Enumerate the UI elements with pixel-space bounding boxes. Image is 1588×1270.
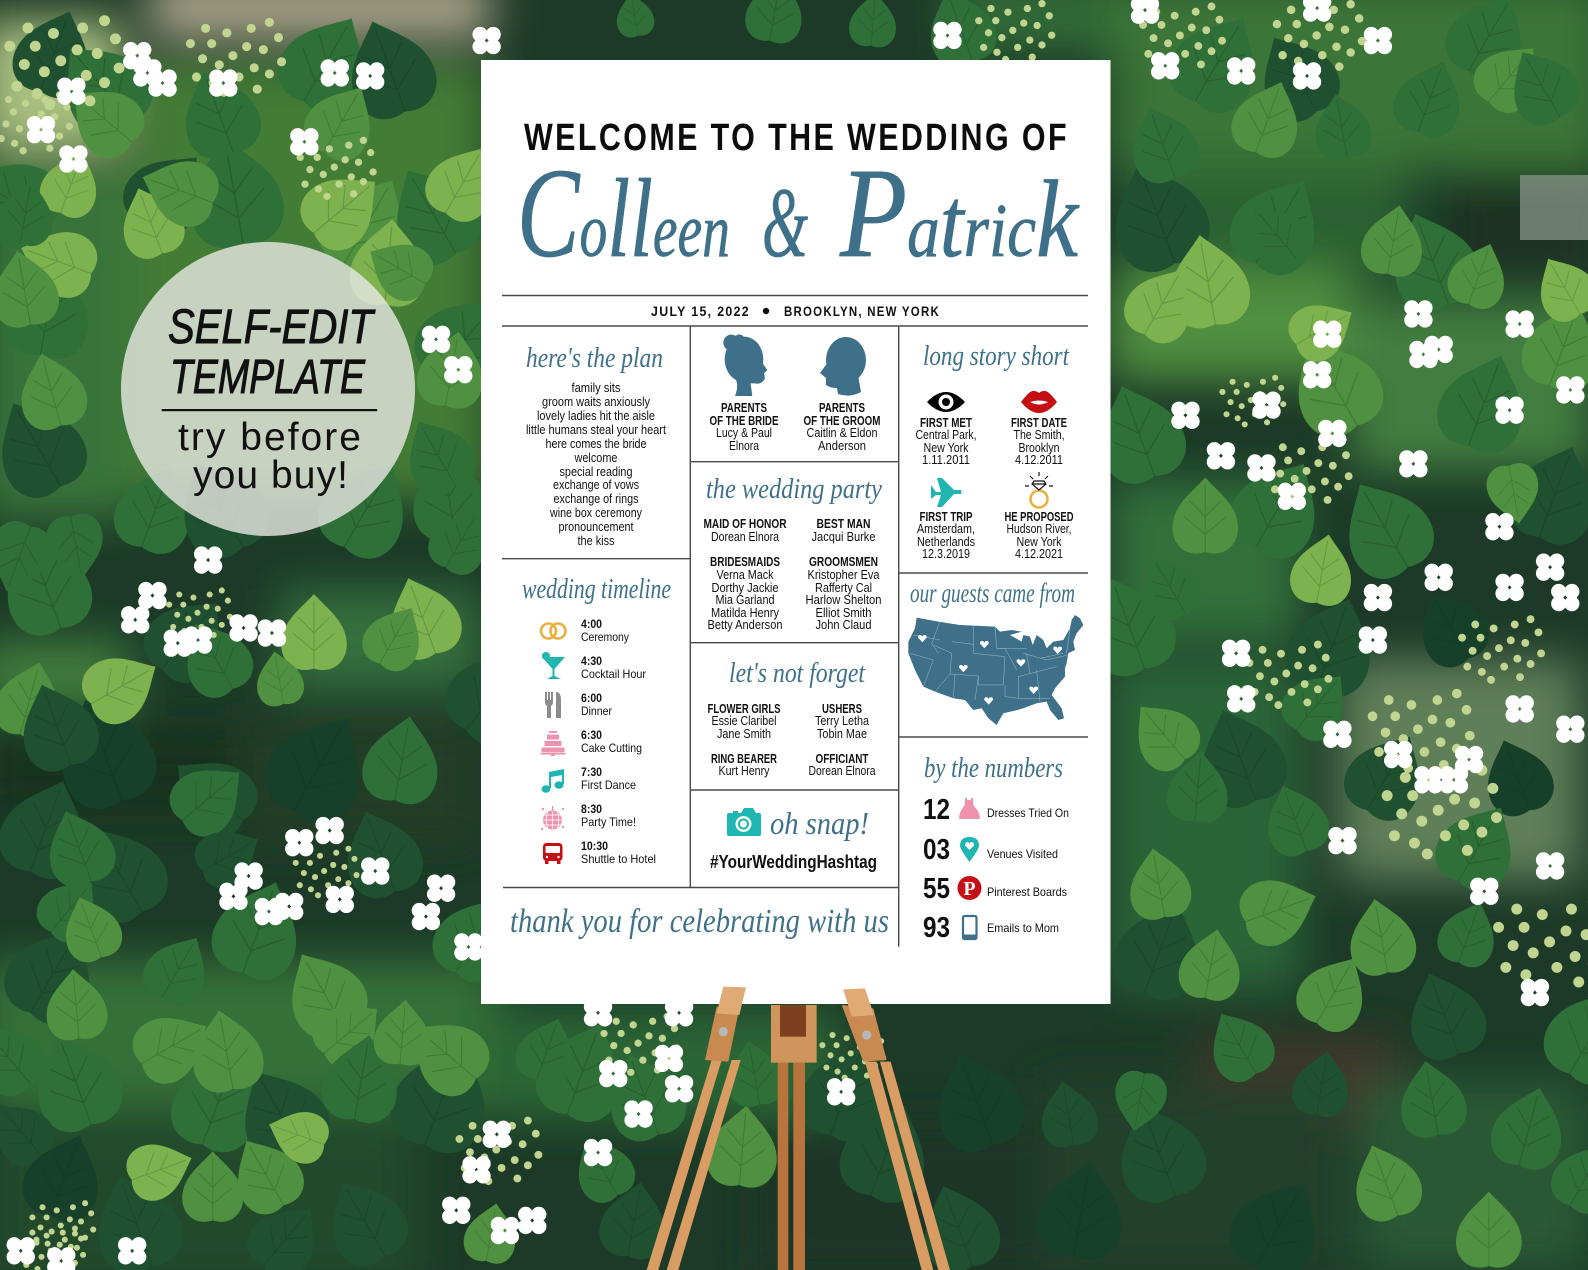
title: WELCOME TO THE WEDDING OF bbox=[524, 117, 1069, 159]
ushers and officiant: USHERS bbox=[822, 702, 862, 716]
bride's side: Mia Garland bbox=[716, 593, 775, 607]
timeline item: first dance: First Dance bbox=[581, 778, 636, 792]
stat: pinterest boards: Pinterest Boards bbox=[987, 885, 1067, 899]
timeline item: cocktail hour: Cocktail Hour bbox=[581, 667, 646, 681]
milestone: first met: New York bbox=[924, 441, 969, 455]
panel: the wedding party bbox=[704, 473, 882, 632]
heading: here's the plan: here's the plan bbox=[526, 342, 663, 374]
bride's side: MAID OF HONOR bbox=[704, 517, 786, 531]
flower girls and ring bearer: FLOWER GIRLS bbox=[708, 702, 780, 716]
milestone: first date bbox=[1011, 416, 1067, 467]
date and location bbox=[651, 303, 940, 319]
stat: dresses tried on: Dresses Tried On bbox=[987, 806, 1069, 820]
window bbox=[1520, 175, 1588, 240]
text: parents of the bride bbox=[710, 401, 778, 453]
timeline item: first dance bbox=[581, 765, 636, 792]
heading: our guests came from: our guests came from bbox=[910, 578, 1075, 608]
ceremony order list: pronouncement bbox=[558, 520, 634, 534]
ceremony order list: wine box ceremony bbox=[549, 506, 643, 520]
ceremony order list: lovely ladies hit the aisle bbox=[537, 409, 655, 423]
badge headline bbox=[168, 301, 376, 404]
ushers and officiant: Dorean Elnora bbox=[808, 764, 876, 778]
panel: wedding timeline bbox=[522, 573, 671, 866]
text: parents of the groom: Caitlin & Eldon bbox=[806, 426, 878, 440]
stat: emails to mom bbox=[923, 912, 1059, 944]
easel bbox=[647, 987, 950, 1270]
flowers bbox=[59, 145, 88, 173]
poster board bbox=[481, 60, 1110, 1004]
stat: emails to mom: 93 bbox=[923, 912, 950, 944]
couple names: Colleen bbox=[517, 142, 730, 284]
text: parents of the bride: Lucy & Paul bbox=[716, 426, 772, 440]
panel: by the numbers bbox=[923, 752, 1069, 944]
groom's side: John Claud bbox=[816, 618, 872, 632]
icon: bus bbox=[543, 843, 562, 864]
milestone: first date: FIRST DATE bbox=[1011, 416, 1067, 430]
timeline item: dinner: Dinner bbox=[581, 704, 612, 718]
timeline item: shuttle to hotel: 10:30 bbox=[581, 839, 608, 853]
timeline item: first dance: 7:30 bbox=[581, 765, 602, 779]
ceremony order list: the kiss bbox=[578, 534, 614, 548]
timeline item: shuttle to hotel bbox=[581, 839, 656, 866]
heading: oh snap: oh snap! bbox=[770, 805, 869, 841]
timeline item: cake cutting: 6:30 bbox=[581, 728, 602, 742]
icon: airplane bbox=[931, 478, 962, 507]
badge headline: SELF-EDIT bbox=[168, 301, 376, 354]
milestone: first trip: 12.3.2019 bbox=[922, 547, 970, 561]
timeline item: cake cutting bbox=[581, 728, 642, 755]
timeline item: party time: Party Time! bbox=[581, 815, 636, 829]
heading: the wedding party: the wedding party bbox=[706, 473, 882, 505]
icon: bride silhouette bbox=[723, 334, 767, 396]
stat: emails to mom: Emails to Mom bbox=[987, 921, 1059, 935]
stat: dresses tried on bbox=[923, 794, 1069, 826]
groom's side: BEST MAN bbox=[816, 517, 870, 531]
couple names bbox=[517, 142, 1080, 284]
badge subline: you buy! bbox=[193, 454, 348, 497]
ceremony order list: exchange of vows bbox=[553, 478, 639, 492]
badge: self-edit template bbox=[121, 242, 415, 536]
panel: our guests came from bbox=[908, 578, 1083, 725]
stat: venues visited: Venues Visited bbox=[987, 847, 1058, 861]
bride's side bbox=[704, 517, 786, 632]
text: parents of the groom: PARENTS bbox=[819, 401, 865, 415]
timeline item: shuttle to hotel: Shuttle to Hotel bbox=[581, 852, 656, 866]
bride's side: Verna Mack bbox=[716, 568, 774, 582]
milestone: first met: Central Park, bbox=[916, 428, 976, 442]
ushers and officiant bbox=[808, 702, 876, 778]
icon: engagement ring bbox=[1025, 472, 1053, 508]
left leaves bbox=[169, 59, 269, 166]
hashtag: #YourWeddingHashtag bbox=[710, 852, 877, 872]
icon: eye bbox=[927, 392, 965, 412]
couple names: & bbox=[762, 167, 808, 278]
timeline item: dinner: 6:00 bbox=[581, 691, 602, 705]
text: parents of the groom: Anderson bbox=[818, 439, 866, 453]
heading: by the numbers: by the numbers bbox=[924, 752, 1063, 784]
milestone: first met: 1.11.2011 bbox=[922, 453, 970, 467]
bride's side: Dorthy Jackie bbox=[712, 581, 779, 595]
groom's side: GROOMSMEN bbox=[809, 555, 878, 569]
groom's side: Elliot Smith bbox=[816, 606, 872, 620]
text: parents of the bride: PARENTS bbox=[721, 401, 767, 415]
bride's side: Matilda Henry bbox=[711, 606, 780, 620]
ceremony order list bbox=[526, 381, 666, 548]
milestone: he proposed: New York bbox=[1016, 535, 1062, 549]
divider grid bbox=[502, 296, 1088, 947]
groom's side bbox=[806, 517, 882, 632]
stat: dresses tried on: 12 bbox=[923, 794, 950, 826]
panel: let's not forget bbox=[708, 657, 876, 778]
text: parents of the bride: OF THE BRIDE bbox=[710, 414, 778, 428]
map: united states with hearts bbox=[908, 615, 1083, 725]
badge subline bbox=[178, 416, 361, 497]
groom's side: Kristopher Eva bbox=[808, 568, 880, 582]
text: parents of the groom: OF THE GROOM bbox=[804, 414, 880, 428]
timeline item: cocktail hour: 4:30 bbox=[581, 654, 602, 668]
icon: disco ball bbox=[541, 806, 564, 830]
flower girls and ring bearer: Kurt Henry bbox=[718, 764, 770, 778]
right leaves bbox=[848, 0, 899, 49]
badge subline: try before bbox=[178, 416, 361, 459]
stat: venues visited bbox=[923, 834, 1058, 866]
flower girls and ring bearer: RING BEARER bbox=[711, 752, 777, 766]
icon: martini bbox=[542, 652, 565, 679]
milestone: he proposed bbox=[1004, 510, 1074, 561]
milestone: first met: FIRST MET bbox=[920, 416, 972, 430]
ceremony order list: little humans steal your heart bbox=[526, 423, 666, 437]
badge headline: TEMPLATE bbox=[170, 351, 366, 404]
timeline item: ceremony: Ceremony bbox=[581, 630, 629, 644]
panel: parents bbox=[710, 334, 880, 453]
center bottom leaves bbox=[704, 1102, 781, 1190]
icon: lips bbox=[1021, 391, 1057, 413]
milestone: first trip bbox=[917, 510, 975, 561]
groom's side: Rafferty Cal bbox=[815, 581, 872, 595]
ceremony order list: exchange of rings bbox=[554, 492, 638, 506]
icon: camera bbox=[727, 808, 761, 836]
ushers and officiant: OFFICIANT bbox=[816, 752, 869, 766]
bride's side: Betty Anderson bbox=[708, 618, 783, 632]
milestone: he proposed: 4.12.2021 bbox=[1015, 547, 1063, 561]
flower girls and ring bearer bbox=[708, 702, 780, 778]
icon: rings bbox=[541, 624, 566, 638]
milestone: he proposed: HE PROPOSED bbox=[1004, 510, 1074, 524]
text: parents of the bride: Elnora bbox=[729, 439, 759, 453]
icon: music notes bbox=[542, 769, 564, 793]
flower girls and ring bearer: Essie Claribel bbox=[712, 714, 776, 728]
timeline item: cocktail hour bbox=[581, 654, 646, 681]
heading: long story short: long story short bbox=[923, 340, 1070, 372]
ceremony order list: welcome bbox=[574, 451, 618, 465]
buds bbox=[4, 15, 125, 110]
ushers and officiant: Tobin Mae bbox=[817, 727, 867, 741]
groom's side: Jacqui Burke bbox=[812, 530, 876, 544]
milestone: first met bbox=[916, 416, 976, 467]
date and location: JULY 15, 2022 bbox=[651, 303, 750, 319]
milestone: first trip: Amsterdam, bbox=[917, 522, 975, 536]
ceremony order list: groom waits anxiously bbox=[542, 395, 651, 409]
milestone: first date: 4.12.2011 bbox=[1015, 453, 1063, 467]
icon: cutlery bbox=[545, 692, 561, 718]
thank you message: thank you for celebrating with us bbox=[510, 903, 889, 940]
couple names: Patrick bbox=[839, 142, 1080, 284]
milestone: first trip: FIRST TRIP bbox=[920, 510, 972, 524]
milestone: first date: The Smith, bbox=[1014, 428, 1064, 442]
milestone: he proposed: Hudson River, bbox=[1006, 522, 1072, 536]
groom's side: Harlow Shelton bbox=[806, 593, 882, 607]
heading: let's not forget: let's not forget bbox=[729, 657, 866, 689]
milestone: first trip: Netherlands bbox=[917, 535, 975, 549]
heading: wedding timeline: wedding timeline bbox=[522, 573, 671, 605]
stat: pinterest boards: P bbox=[963, 878, 976, 900]
icon: groom silhouette bbox=[820, 337, 866, 396]
timeline item: dinner bbox=[581, 691, 612, 718]
stat: pinterest boards: 55 bbox=[923, 873, 950, 905]
milestone: first date: Brooklyn bbox=[1018, 441, 1060, 455]
icon: cake bbox=[540, 731, 566, 756]
ceremony order list: special reading bbox=[560, 465, 633, 479]
timeline item: ceremony: 4:00 bbox=[581, 617, 602, 631]
ushers and officiant: Terry Letha bbox=[815, 714, 869, 728]
ceremony order list: family sits bbox=[572, 381, 620, 395]
timeline item: cake cutting: Cake Cutting bbox=[581, 741, 642, 755]
timeline item: party time bbox=[581, 802, 636, 829]
ceremony order list: here comes the bride bbox=[546, 437, 647, 451]
timeline item: ceremony bbox=[581, 617, 629, 644]
text: parents of the groom bbox=[804, 401, 880, 453]
flower girls and ring bearer: Jane Smith bbox=[717, 727, 771, 741]
bride's side: BRIDESMAIDS bbox=[710, 555, 780, 569]
stat: pinterest boards bbox=[923, 873, 1067, 905]
timeline item: party time: 8:30 bbox=[581, 802, 602, 816]
texture layer of darker leaves bbox=[5, 0, 105, 106]
bride's side: Dorean Elnora bbox=[711, 530, 779, 544]
panel: long story short bbox=[916, 340, 1074, 561]
panel: here's the plan bbox=[526, 342, 666, 548]
stat: venues visited: 03 bbox=[923, 834, 950, 866]
panel: oh snap bbox=[710, 805, 877, 872]
date and location: BROOKLYN, NEW YORK bbox=[784, 303, 940, 319]
